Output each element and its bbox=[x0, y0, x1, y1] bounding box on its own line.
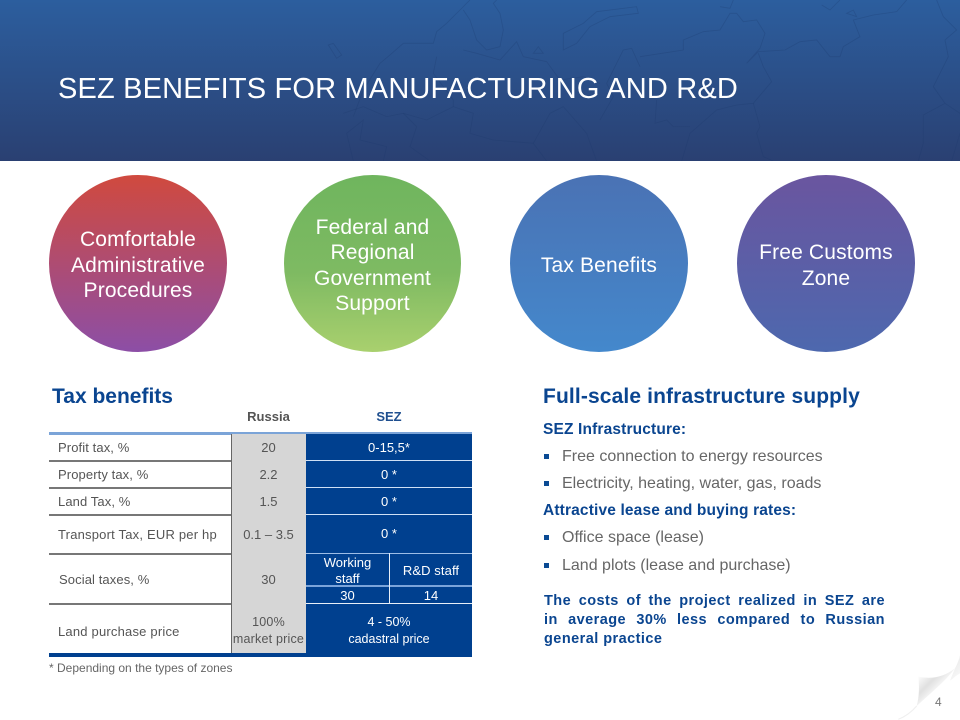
bullet: utilities: Electricity, heating, water, gas, roads bbox=[562, 475, 821, 492]
callout: The costs of the project realized in SEZ are bbox=[544, 593, 885, 609]
value: r&d staff: R&D staff bbox=[403, 563, 459, 578]
column header: Russia: Russia bbox=[247, 409, 290, 424]
map outline bbox=[328, 0, 957, 114]
circle: free customs zone: Zone bbox=[802, 266, 850, 290]
bullet: connection: Free connection to energy resources bbox=[562, 448, 823, 465]
row: land purchase: Land purchase price bbox=[58, 624, 180, 639]
value: working staff bbox=[324, 555, 371, 586]
row: land tax: Land Tax, % bbox=[58, 494, 130, 509]
circle: comfortable administrative procedures bbox=[49, 175, 227, 352]
circle: tax benefits: Tax Benefits bbox=[541, 254, 657, 277]
circle: free customs zone bbox=[737, 175, 915, 352]
value: working staff: staff bbox=[335, 570, 360, 586]
value: sez property: 0 * bbox=[381, 467, 397, 482]
subheading: rates: Attractive lease and buying rates: bbox=[543, 502, 796, 519]
value: russia social: 30 bbox=[261, 572, 276, 587]
value: russia profit: 20 bbox=[261, 440, 276, 455]
value: working 30: 30 bbox=[340, 588, 355, 603]
subheading: sez infrastructure: SEZ Infrastructure: bbox=[543, 421, 686, 438]
value: russia transport: 0.1 – 3.5 bbox=[243, 527, 294, 542]
circle: comfortable administrative procedures: Comfortable bbox=[80, 228, 196, 251]
circle: comfortable administrative procedures: Administrative bbox=[71, 254, 205, 277]
circle: comfortable administrative procedures: Procedures bbox=[84, 279, 192, 302]
column header: SEZ: SEZ bbox=[376, 409, 402, 424]
value: sez land purchase: 4 - 50% bbox=[367, 615, 411, 629]
circle: government support: Federal and bbox=[316, 216, 429, 238]
circle: free customs zone: Free Customs bbox=[759, 241, 893, 264]
bullet: office: Office space (lease) bbox=[562, 529, 704, 546]
value: russia land purchase bbox=[233, 615, 304, 646]
value: sez transport: 0 * bbox=[381, 526, 397, 541]
value: sez land purchase: cadastral price bbox=[348, 632, 430, 646]
row: transport tax: Transport Tax, EUR per hp bbox=[58, 527, 217, 542]
header banner bbox=[0, 0, 960, 161]
header rule bbox=[49, 432, 472, 434]
circle: government support bbox=[284, 175, 461, 352]
value: russia land purchase: market price bbox=[233, 632, 304, 646]
title: SEZ BENEFITS FOR MANUFACTURING AND R&D bbox=[58, 72, 738, 104]
row: property tax: Property tax, % bbox=[58, 467, 148, 482]
russia column bbox=[231, 434, 306, 653]
circle: tax benefits bbox=[510, 175, 688, 352]
circle: government support: Support bbox=[335, 292, 410, 315]
bullet: land: Land plots (lease and purchase) bbox=[562, 557, 791, 574]
value: working staff: Working bbox=[324, 555, 371, 570]
value: russia land purchase: 100% bbox=[252, 615, 285, 629]
row: profit tax: Profit tax, % bbox=[58, 440, 129, 455]
value: sez profit: 0-15,5* bbox=[368, 440, 410, 455]
row: social taxes: Social taxes, % bbox=[59, 572, 149, 587]
table bottom band bbox=[49, 653, 472, 657]
value: russia land: 1.5 bbox=[259, 494, 278, 509]
circle: government support: Government bbox=[314, 266, 431, 290]
value: russia property: 2.2 bbox=[259, 467, 278, 482]
heading: tax benefits: Tax benefits bbox=[52, 385, 173, 408]
page number: 4 bbox=[935, 695, 942, 709]
value: sez land: 0 * bbox=[381, 494, 397, 509]
circle: government support: Regional bbox=[330, 241, 415, 264]
sez column bbox=[306, 434, 472, 657]
callout bbox=[544, 593, 885, 647]
callout: in average 30% less compared to Russian bbox=[544, 612, 885, 628]
heading: infrastructure: Full-scale infrastructure supply bbox=[543, 385, 860, 408]
footnote: * Depending on the types of zones bbox=[49, 661, 232, 675]
value: r&d 14: 14 bbox=[424, 588, 438, 603]
page curl bbox=[898, 656, 960, 720]
value: sez land purchase bbox=[348, 615, 430, 646]
callout: general practice bbox=[544, 631, 662, 647]
